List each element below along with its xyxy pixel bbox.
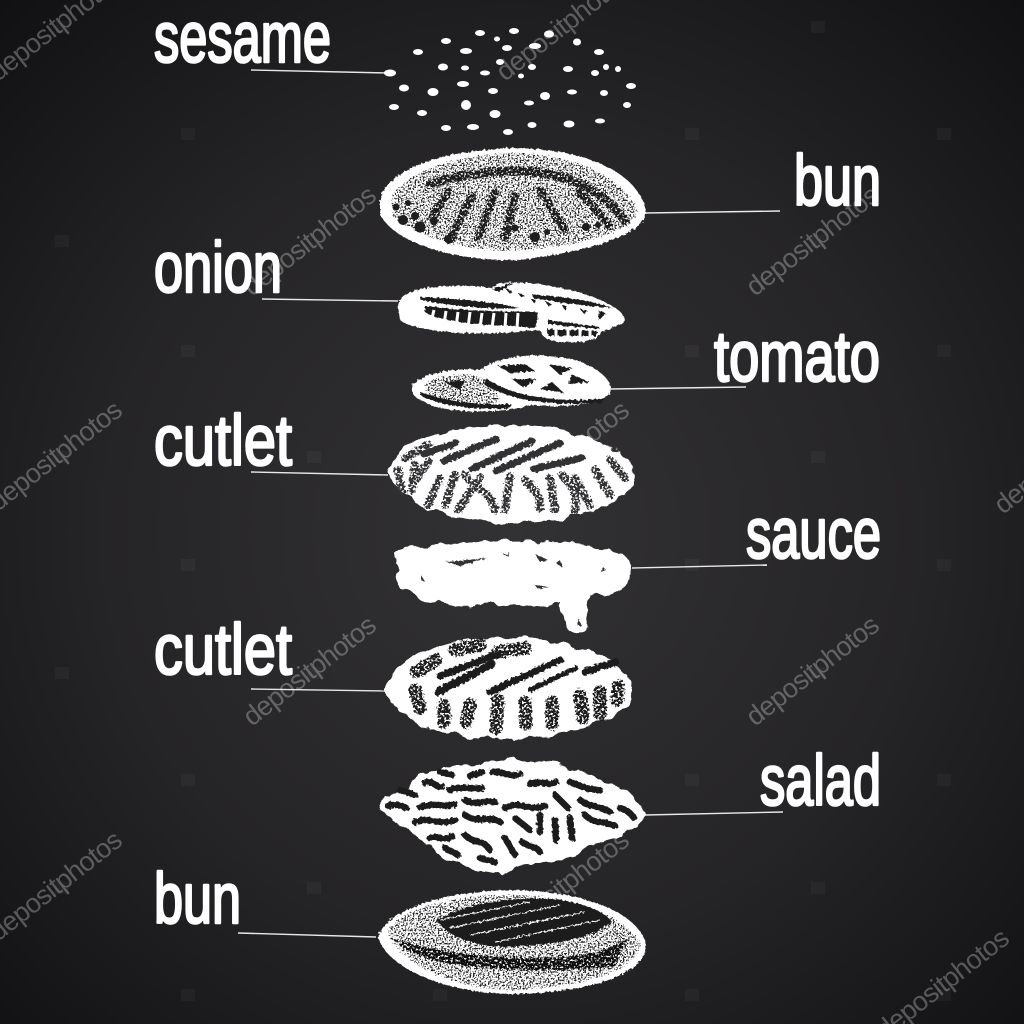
watermarks: depositphotos	[237, 610, 382, 732]
label: bun top: bun	[794, 142, 881, 221]
bun bottom	[378, 890, 646, 994]
cutlet upper	[389, 425, 636, 524]
salad	[382, 757, 645, 873]
watermarks: depositphotos	[490, 825, 635, 947]
label: tomato: tomato	[714, 318, 880, 397]
label: onion: onion	[154, 229, 282, 308]
watermarks: depositphotos	[740, 180, 885, 302]
label: sauce: sauce	[746, 495, 881, 574]
tomato slices	[412, 356, 611, 411]
sesame seeds	[384, 28, 636, 135]
watermarks: depositphotos	[490, 395, 635, 517]
watermarks: depositphotos	[740, 610, 885, 732]
label: sesame: sesame	[154, 0, 331, 78]
label: bun bottom: bun	[154, 860, 241, 939]
label: salad: salad	[760, 742, 881, 821]
label: cutlet upper: cutlet	[154, 402, 292, 481]
label: cutlet lower: cutlet	[154, 611, 292, 690]
bun top	[380, 148, 646, 260]
leader lines	[238, 70, 783, 937]
sauce	[395, 540, 632, 633]
watermarks: depositphotos	[237, 180, 382, 302]
cutlet lower	[387, 638, 634, 738]
onion rings	[398, 282, 624, 342]
